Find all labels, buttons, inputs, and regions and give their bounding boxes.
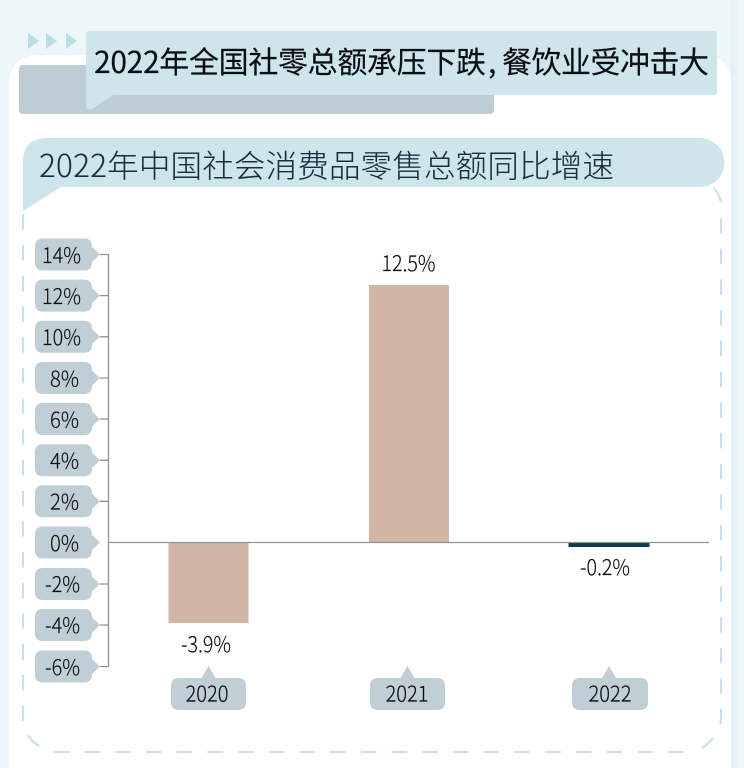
category label: 2020: 2020 [186,678,228,708]
title backing bar [19,65,494,114]
heading: chart title: 2022年中国社会消费品零售总额同比增速 [39,141,614,187]
y axis labels: 2% [50,486,79,516]
y axis labels: -4% [45,609,80,640]
y axis labels: 6% [50,404,79,434]
y axis labels: 4% [50,444,79,476]
category label: 2022: 2022 [588,678,632,708]
y axis labels: -2% [45,568,80,599]
dashed chart frame [23,188,721,752]
y axis labels [35,238,100,682]
bar: 2020 [168,542,248,623]
value: 2022: -0.2% [580,551,630,582]
y axis labels: 0% [50,527,79,558]
y axis labels: 10% [42,321,81,352]
icon: three arrows [28,33,77,49]
y axis labels: 14% [42,239,81,270]
y axis labels: 12% [42,280,81,311]
category label: 2021: 2021 [386,678,428,708]
x axis line [108,542,709,544]
category label: 2021 [370,666,445,710]
y axis labels: 8% [50,362,79,394]
heading: main title: 2022年全国社零总额承压下跌 [94,38,486,82]
heading: main title: , [488,38,496,82]
heading: chart title [23,138,724,211]
value: 2021: 12.5% [382,247,436,278]
heading: main title [86,31,717,110]
category label: 2022 [572,666,648,710]
bar: 2021 [369,285,449,542]
category label: 2020 [171,666,246,710]
heading: main title: 餐饮业受冲击大 [502,38,709,82]
y axis [35,238,108,682]
y axis labels: -6% [45,651,80,682]
value: 2020: -3.9% [181,628,231,659]
bar: 2022 [568,542,650,547]
